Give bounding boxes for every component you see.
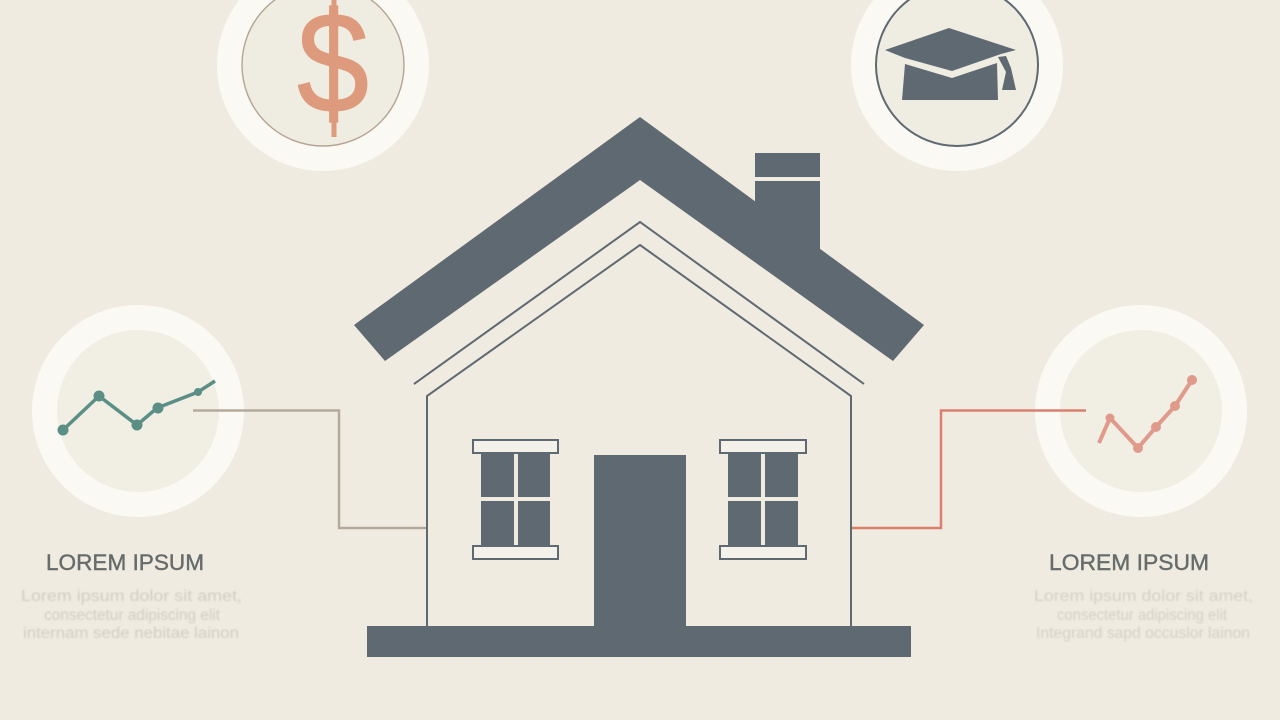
icon: teal line chart circle: [32, 305, 244, 517]
foundation: [367, 626, 911, 657]
roof: [354, 117, 924, 361]
right body text: Lorem ipsum dolor sit amet,: [1034, 588, 1253, 605]
right body text: [1034, 588, 1253, 642]
icon: coral line chart circle: [1035, 305, 1247, 517]
left body text: Lorem ipsum dolor sit amet,: [21, 588, 242, 605]
icon: dollar circle: [217, 0, 429, 171]
roof inner outline: [414, 222, 864, 384]
left text block: [21, 550, 242, 642]
left heading: LOREM IPSUM: [46, 550, 204, 575]
icon: graduation cap circle: [851, 0, 1063, 171]
connector: right chart to house: [851, 410, 1086, 528]
left body text: internam sede nebitae lainon: [23, 625, 239, 642]
connector: left chart to house: [193, 410, 427, 528]
right text block: [1034, 550, 1253, 642]
chimney: [755, 153, 820, 261]
left window: [473, 440, 558, 559]
right body text: consectetur adipiscing elit: [1057, 607, 1228, 624]
right body text: Integrand sapd occuslor lainon: [1036, 625, 1250, 642]
left body text: [21, 588, 242, 642]
right heading: LOREM IPSUM: [1049, 550, 1209, 575]
right window: [720, 440, 806, 559]
house walls: [427, 245, 851, 628]
left body text: consectetur adipiscing elit: [44, 607, 221, 624]
door: [594, 455, 686, 630]
house illustration: [354, 117, 924, 657]
